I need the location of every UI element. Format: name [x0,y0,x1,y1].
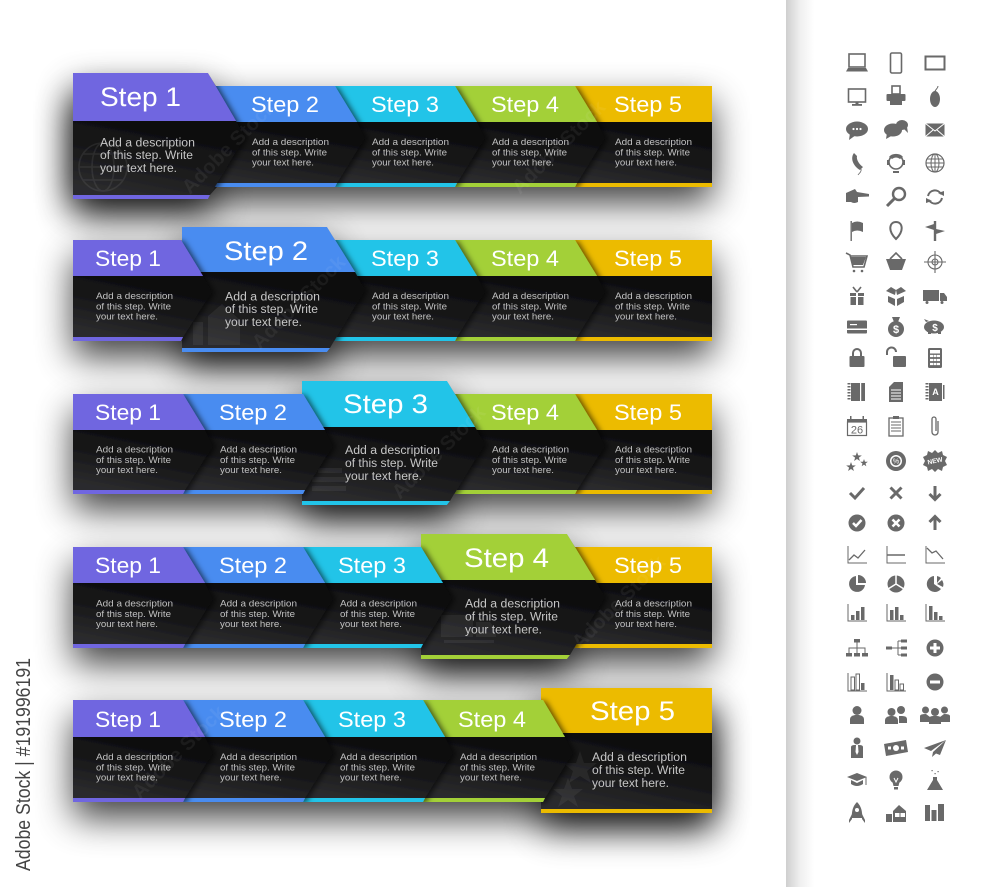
watermark text: Adobe Stock [178,96,281,199]
icon: basket [886,253,906,270]
step 2: your text here. [220,619,282,630]
step 5: Add a description [615,291,692,302]
step 1: Add a description [96,444,173,456]
icon: piggy bank [924,319,944,334]
step 4 [445,240,605,341]
step 4: your text here. [492,465,554,476]
icon: smartphone [890,53,902,73]
icon: check mark [850,488,864,498]
step 4 large: Step 4 [464,543,549,573]
step 5: of this step. Write [615,609,690,620]
step 3: Step 3 [371,246,439,271]
icon: telephone handset [852,153,863,175]
icon: computer mouse [930,86,940,107]
step 1: your text here. [96,619,158,630]
step 3 large: Add a description [345,445,440,457]
step 3: Add a description [340,752,417,763]
icon: pointing hand [846,189,869,203]
icon: outlined bars two [887,673,906,691]
icon: two speech bubbles [884,120,908,139]
step 1 large: Add a description [100,138,195,150]
icon: signpost [925,221,945,241]
step 2 large: Add a description [225,292,320,304]
step 1: of this step. Write [96,455,171,466]
step 5: your text here. [615,158,677,169]
watermark text: Adobe Stock [248,251,351,354]
step 4: Step 4 [491,92,559,117]
step 2: your text here. [220,465,282,476]
step 2 [175,547,333,648]
step 3: of this step. Write [372,147,447,158]
right icon panel edge shadow [786,0,814,887]
step 2: Add a description [220,444,297,456]
step 5: Step 5 [614,92,682,117]
step 5 [560,240,712,341]
icon: shopping cart [846,253,867,272]
step 1: Step 1 [95,400,161,425]
step 5: your text here. [615,465,677,476]
step 3: Step 3 [338,553,406,578]
step 4 large: your text here. [465,624,542,636]
icon: percent badge [886,451,906,471]
icon: percent badge: % [893,458,899,466]
watermark text: Adobe Stock [568,551,671,654]
step 5: Add a description [615,137,692,148]
step 2: of this step. Write [252,147,327,158]
icon: printer [886,86,906,105]
icon: calendar: 26 [851,424,863,436]
step 1 large: of this step. Write [100,150,193,162]
step 1: Step 1 [95,553,161,578]
step 3: of this step. Write [340,609,415,620]
watermark text: Adobe Stock [128,701,231,804]
icon: calendar [847,416,867,436]
watermark text: Adobe Stock [388,401,491,504]
step 2 [175,394,333,494]
step 3: Add a description [372,291,449,302]
step 1 [73,700,213,802]
step 2 [175,700,333,802]
icon: two people [885,706,907,724]
step 4: of this step. Write [460,762,535,773]
step 4 [415,700,573,802]
step 3 large: your text here. [345,471,422,483]
step 4: Add a description [460,752,537,763]
icon: new burst [923,450,947,472]
step 2: Step 2 [251,92,319,117]
icon: three people [920,706,950,724]
icon: plus circle [926,640,944,656]
icon: open padlock [887,348,906,367]
icon: globe [926,154,944,172]
step 2: of this step. Write [220,455,295,466]
step 1 [73,547,213,648]
step 4: your text here. [492,158,554,169]
step 4 large [421,534,605,659]
step 1: Add a description [96,291,173,302]
step 1: of this step. Write [96,301,171,312]
step 2 [200,86,365,187]
step 4: Add a description [492,444,569,456]
step 4: of this step. Write [492,301,567,312]
icon: tree diagram [886,640,907,656]
step 2: Add a description [252,137,329,148]
icon: banknotes [884,740,908,756]
step 2 large: Step 2 [224,236,308,266]
icon: laptop [846,54,868,72]
icon: check circle [848,514,866,532]
step 3: your text here. [340,773,402,784]
icon: cross circle [888,514,904,532]
icon: rising line chart [848,546,867,563]
step 2: your text here. [252,158,314,169]
step 3: your text here. [340,619,402,630]
icon: spiral notebook [849,383,865,401]
step 1: your text here. [96,773,158,784]
step 4: Add a description [492,137,569,148]
icon: money bag [888,317,904,337]
icon: clipboard [889,416,903,436]
icon: refresh arrows [926,190,944,204]
step 3 [325,86,485,187]
icon: cross mark [890,488,902,498]
icon: credit card [847,320,867,334]
icon: house [886,805,906,822]
step 1 large: Step 1 [100,82,181,112]
step 1 large: your text here. [100,163,177,175]
step 1: Step 1 [95,246,161,271]
panel: row 4, step 4 highlighted [73,534,712,659]
step 4 large: of this step. Write [465,612,558,624]
step 5: Step 5 [614,400,682,425]
step 3 [295,547,452,648]
icon: person [850,706,864,724]
step 4 [440,394,605,494]
icon: envelope [926,124,944,136]
step 4: of this step. Write [492,455,567,466]
icon: minus circle [926,674,944,690]
step 2: Add a description [220,752,297,763]
icon: light bulb [890,770,902,790]
step 5: Add a description [615,444,692,456]
row shadows [40,60,745,858]
icon: map pin [890,222,902,239]
icon: descending bars [926,604,945,621]
step 1 [73,240,212,341]
step 5: of this step. Write [615,301,690,312]
step 2: of this step. Write [220,609,295,620]
icon: science flask [927,770,943,790]
step 5 large: Step 5 [590,696,675,726]
step 2: Step 2 [219,553,287,578]
icon: flat line chart [887,546,906,563]
icon: falling line chart [926,546,945,563]
step 3: Add a description [340,598,417,610]
step 5 large: Add a description [592,752,687,764]
icon: gift box [850,287,864,305]
step 5: Step 5 [614,246,682,271]
step 3 large [302,381,485,505]
icon: address book [927,383,944,401]
icon: support agent [887,154,905,173]
watermark text [128,96,671,804]
step 2: your text here. [220,773,282,784]
step 4 large: Add a description [465,598,560,610]
icon: document [889,382,903,402]
step 4: of this step. Write [492,147,567,158]
icon: monitor [848,89,866,106]
step 5 large: your text here. [592,778,669,790]
icon: city buildings [925,804,944,821]
icon: delivery truck [923,290,947,304]
icon: exploded pie [927,576,943,592]
step 3: Step 3 [338,707,406,732]
step 3: of this step. Write [340,762,415,773]
step 5: Step 5 [614,553,682,578]
step 3 large: Step 3 [343,389,428,419]
step 1 large [73,73,245,199]
panel: icon set [846,53,950,823]
icon: ascending bars [848,604,867,621]
icon: piggy bank: $ [932,323,938,334]
step 5: Add a description [615,598,692,610]
step 4: your text here. [460,773,522,784]
icon: three-slice pie [888,575,904,592]
step 5 [560,86,712,187]
step 2 large: of this step. Write [225,304,318,316]
panel: row 1, step 1 highlighted [73,73,712,199]
step 3: Add a description [372,137,449,148]
panel: row 2, step 2 highlighted [73,227,712,352]
step 4: Step 4 [458,707,526,732]
panel: row 3, step 3 highlighted [73,381,712,505]
step 2: of this step. Write [220,762,295,773]
icon: address book: A [932,387,939,397]
icon: money bag: $ [893,324,899,336]
panel: row 5, step 5 highlighted [73,688,712,813]
icon: businessman [851,738,863,758]
icon: calculator [928,348,942,368]
icon: new burst: NEW [927,456,944,466]
step 3 large: of this step. Write [345,458,438,470]
step 1: of this step. Write [96,609,171,620]
icon: graduation cap [847,773,867,786]
icon: org chart [846,639,868,656]
icon: magnifier [887,188,905,206]
step 3: of this step. Write [372,301,447,312]
icon: up arrow [930,516,940,530]
step 2 large: your text here. [225,317,302,329]
step 4 [445,86,605,187]
step 1: Add a description [96,752,173,763]
step 3 [295,700,453,802]
icon: flag [850,221,863,241]
step 5: your text here. [615,312,677,323]
step 5 [560,547,712,648]
step 4: Add a description [492,291,569,302]
step 1: Add a description [96,598,173,610]
watermark text: Adobe Stock [508,96,611,199]
icon: outlined bars [848,673,867,691]
step 2 large [182,227,365,352]
step 5: of this step. Write [615,455,690,466]
step 4: Step 4 [491,400,559,425]
icon: rocket [849,802,865,823]
step 1: your text here. [96,312,158,323]
step 2: Step 2 [219,400,287,425]
step 4: your text here. [492,312,554,323]
step 1: your text here. [96,465,158,476]
step 1 [73,394,213,494]
step 4: Step 4 [491,246,559,271]
step 3: Step 3 [371,92,439,117]
icon: down arrow [930,486,940,500]
icon: target [924,251,946,273]
step 5: your text here. [615,619,677,630]
icon: closed padlock [850,349,864,367]
icon: tablet [926,56,944,70]
vertical credit text: Adobe Stock | #191996191 [13,658,35,871]
step 5 large [541,688,712,813]
step 5 large: of this step. Write [592,765,685,777]
step 1: of this step. Write [96,762,171,773]
step 1: Step 1 [95,707,161,732]
icon: open box [886,287,906,306]
icon: stars [846,452,868,471]
step 2: Step 2 [219,707,287,732]
icon: speech bubble [846,122,868,140]
icon: paper plane [924,740,946,757]
step 5 [560,394,712,494]
step 2: Add a description [220,598,297,610]
step 5: of this step. Write [615,147,690,158]
icon: paperclip [932,417,938,435]
step 3: your text here. [372,312,434,323]
icon: pie chart [849,575,866,592]
step 3 [320,240,485,341]
step 3: your text here. [372,158,434,169]
icon: mixed bars [887,604,906,621]
